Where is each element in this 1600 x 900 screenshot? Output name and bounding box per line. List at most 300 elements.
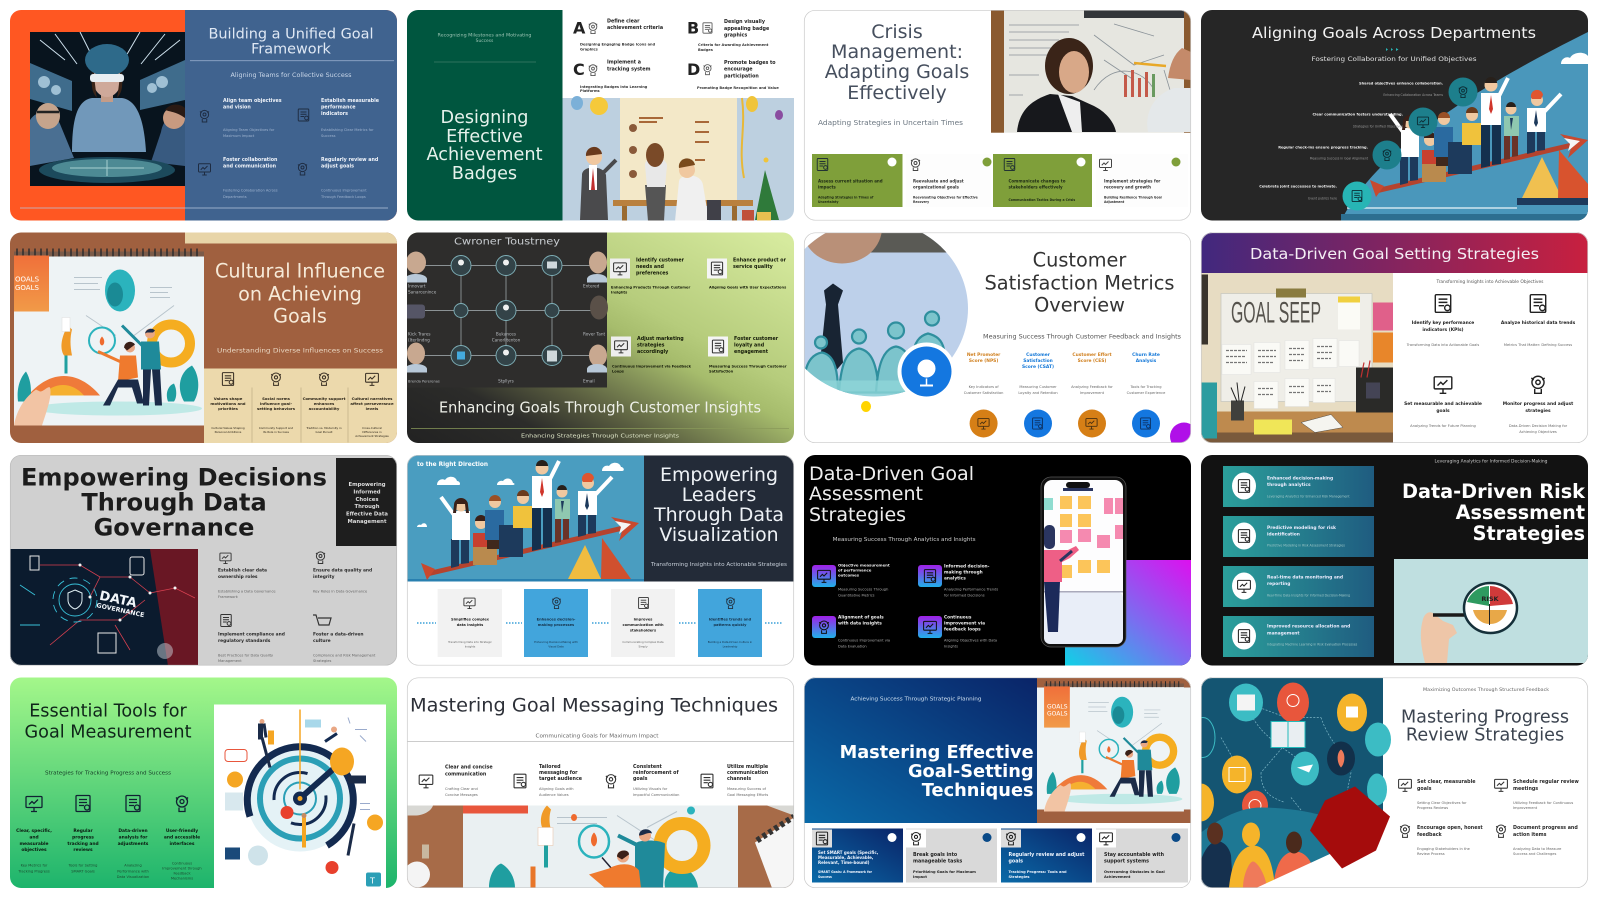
white base [1201, 232, 1588, 443]
slide card: Essential Tools for Goal Measurement [10, 678, 397, 888]
item: data quality: Ensure data quality and [313, 568, 372, 574]
chalkboard network image: Sanarcenince [408, 290, 437, 294]
slide card: Empowering Leaders Through Data Visualization [407, 455, 794, 666]
subtitle: Measuring Success Through Customer Feedback and Insights [983, 334, 1181, 340]
item: informed decisions: Analyzing Performance Trends [944, 588, 998, 592]
card: simplifies: Simplifies complex [451, 618, 490, 622]
white base [804, 10, 1191, 220]
card: trends: Leadership [723, 644, 738, 648]
slide card: Enhancing Goals Through Customer Insights [405, 232, 794, 443]
item: feedback [1400, 825, 1483, 856]
item A: Designing Engaging Badge Icons and [580, 42, 656, 46]
col: churn: Churn Rate [1132, 352, 1160, 358]
col: CSAT: Loyalty and Retention [1018, 391, 1058, 395]
item: alignment [812, 614, 890, 648]
item: tailored messaging: messaging for [539, 770, 578, 776]
item: reinforcement [606, 764, 679, 797]
goals illustration [14, 248, 204, 426]
heading: Mastering Effective [840, 742, 1034, 763]
item: enhanced decision-making: through analytics [1267, 482, 1311, 488]
item: review goals: adjust goals [321, 164, 354, 170]
step cards: impacts [818, 184, 836, 190]
item: ownership roles: Establish clear data [218, 568, 267, 574]
item: objective measurement: outcomes [838, 572, 860, 578]
heading [1402, 480, 1586, 545]
item: measurable indicators: Establishing Clear Metrics for [321, 128, 374, 132]
heading [215, 260, 385, 328]
item: celebrate successes [1259, 182, 1372, 210]
heading: Through Data [653, 504, 784, 526]
item: multiple channels: Goal Messaging Efforts [727, 793, 768, 797]
tab caption: OOALS [15, 276, 40, 284]
item: identify customer needs: needs and [636, 264, 665, 270]
item: ownership roles [218, 553, 276, 599]
heading: Empowering [660, 464, 778, 486]
footer subtitle: Enhancing Strategies Through Customer Insights [521, 434, 680, 440]
item: predictive modeling: Predictive Modeling in Risk Assessment Strategies [1267, 544, 1345, 548]
item: monitor progress: Monitor progress and adjust [1503, 401, 1573, 407]
decorative dots [1386, 48, 1398, 51]
card: accountable: support systems [1104, 858, 1149, 864]
item: multiple channels [701, 764, 769, 797]
item: data quality [313, 552, 372, 594]
item: informed decisions: analytics [944, 576, 966, 582]
item: marketing strategies: Loops [612, 370, 624, 374]
heading [1401, 708, 1569, 746]
heading [210, 28, 372, 54]
illustration: goal dial: T [369, 876, 375, 886]
green panel [407, 10, 562, 220]
item: data culture: culture [313, 638, 331, 644]
heading [426, 108, 543, 184]
item: identify customer needs: Identify customer [636, 258, 685, 264]
photo: team around holographic table [30, 32, 185, 186]
item: alignment: with data insights [838, 620, 882, 626]
col: community: accountability [309, 406, 340, 411]
card: improves: Simply [638, 644, 648, 648]
item: reinforcement: goals [633, 776, 648, 782]
item: celebrate successes: Event publics here [1308, 196, 1337, 200]
dark callout: Empowering [348, 482, 386, 488]
heading: Satisfaction Metrics [984, 272, 1174, 294]
card: improves: communication with [622, 623, 664, 627]
item: clear concise: Clear and concise [445, 764, 493, 770]
subtitle: Strategies for Tracking Progress and Success [45, 770, 171, 776]
item: review meetings: Schedule regular review [1513, 779, 1579, 785]
heading: Mastering Progress [1401, 708, 1569, 728]
item: foster collaboration: and communication [223, 164, 277, 170]
heading: Empowering Decisions [21, 464, 327, 492]
item: align team objectives: and vision [223, 104, 251, 110]
card: review goals: goals [1008, 858, 1023, 864]
chalkboard network image [405, 232, 608, 388]
col: values: Personal Ambitions [215, 430, 242, 434]
item: informed decisions: for Informed Decisions [944, 594, 985, 598]
heading: Building a Unified Goal [208, 26, 374, 42]
subtitle: Fostering Collaboration for Unified Objectives [1312, 56, 1476, 63]
item: product quality: Aligning Goals with User Expectations [709, 286, 786, 290]
illustration: goal dial [214, 704, 386, 888]
item: document progress: Success and Challenges [1513, 852, 1556, 856]
item D: encourage [724, 66, 753, 72]
item: monitor progress: Achieving Objectives [1519, 430, 1557, 434]
col: interfaces: Continuous [172, 862, 192, 866]
col: CSAT [1018, 352, 1058, 438]
chalkboard network image: Entered [583, 284, 600, 288]
col: interfaces: and accessible [164, 834, 200, 840]
item: review goals: Regularly review and [321, 157, 379, 163]
heading: Governance [94, 514, 254, 542]
item: celebrate successes: Celebrate joint successes to motivate. [1259, 184, 1337, 188]
item: feedback: feedback [1417, 832, 1443, 838]
heading [984, 248, 1174, 316]
col: narratives: Cultural narratives [352, 396, 393, 401]
item: clear goals: Progress Reviews [1417, 806, 1448, 810]
card: enhances: Enhancing Decision-Making with [534, 640, 578, 644]
item: review meetings [1495, 779, 1579, 810]
illustration: badge party scene [562, 96, 794, 221]
heading: Cultural Influence [215, 260, 385, 282]
item: feedback: Engaging Stakeholders in the [1417, 847, 1471, 851]
item: KPIs: Transforming Data into Actionable Goals [1406, 343, 1479, 347]
col: tracking [67, 796, 99, 874]
step cards: Communication Tactics During a Crisis [1008, 198, 1075, 202]
heading: Techniques [922, 780, 1034, 801]
image caption: to the Right Direction [417, 462, 488, 468]
step cards: Assess current situation and [818, 178, 883, 184]
item C: C [573, 60, 585, 79]
sails [568, 545, 601, 579]
col: NPS: Net Promoter [967, 352, 1001, 358]
heading: Assessment [809, 483, 923, 505]
item: historical trends: Analyze historical data trends [1501, 320, 1576, 326]
item: compliance [218, 614, 285, 663]
item: multiple channels: Measuring Success of [727, 787, 767, 791]
gradient block [1065, 560, 1191, 666]
col: CES: Analyzing Feedback for [1071, 385, 1113, 389]
heading: Goal Measurement [24, 722, 192, 742]
item: informed decisions: Informed decision- [944, 564, 990, 570]
step cards: Building Resilience Through Goal [1104, 196, 1162, 200]
col: data-driven [117, 796, 149, 879]
slide card: Aligning Goals Across Departments [1201, 10, 1588, 221]
black background [804, 455, 1191, 666]
card: review goals: Regularly review and adjust [1008, 852, 1085, 858]
item: KPIs [1406, 295, 1479, 347]
item: enhanced decision-making: Leveraging Analytics for Enhanced Risk Management [1267, 494, 1350, 498]
slide card: Building a Unified Goal Framework [10, 10, 397, 220]
dark title panel [644, 455, 794, 582]
slide card: Designing Effective Achievement Badges [407, 10, 794, 221]
item: clear goals: Setting Clear Objectives for [1417, 801, 1467, 805]
card: trends: Building a Data-Driven Culture in [708, 640, 753, 644]
cloud [1561, 53, 1588, 64]
dark callout: Effective Data [346, 512, 388, 518]
col: values: Values shape [214, 396, 243, 401]
card: SMART goals [812, 828, 903, 882]
item C [573, 60, 650, 93]
item: align team objectives: Align team objectives [223, 98, 282, 104]
col: data-driven: Analyzing [124, 864, 142, 868]
heading [809, 463, 974, 526]
card: enhances: Visual Data [548, 644, 564, 648]
step cards: Reevaluate and adjust [913, 178, 964, 184]
item: continuous improvement: Continuous [944, 614, 972, 620]
col: social norms: Its Role in Success [263, 430, 289, 434]
col: clear objectives: objectives [21, 847, 47, 853]
item: clear goals: goals [1417, 786, 1432, 792]
item: multiple channels: Utilize multiple [727, 764, 769, 770]
col: social norms: setting behaviors [257, 406, 296, 411]
yellow dot [861, 401, 871, 412]
blue content panel [185, 10, 397, 220]
item: product quality [707, 258, 787, 290]
card: review goals: Strategies [1008, 875, 1030, 879]
heading: Effective [446, 127, 523, 147]
heading [653, 464, 784, 546]
heading: Adapting Goals [825, 61, 969, 83]
heading: Strategies [1473, 522, 1585, 545]
brown base [10, 232, 397, 443]
small caption: Success [476, 38, 494, 44]
slide card: Empowering Decisions Through Data Governance [10, 455, 397, 666]
item C: Integrating Badges into Learning [580, 85, 648, 89]
card: accountable: Achievement [1104, 875, 1131, 879]
item: measurable indicators: Success [321, 134, 336, 138]
caption: Leveraging Analytics for Informed Decision-Making [1434, 458, 1548, 464]
heading: Customer [1033, 248, 1126, 272]
step cards: Recovery [913, 200, 929, 204]
col: tracking: tracking and [67, 841, 99, 847]
white base [804, 678, 1191, 888]
item: tailored messaging: Audience Values [539, 793, 569, 797]
gradient background [407, 232, 794, 443]
slide card: Data-Driven Risk Assessment Strategies [1201, 455, 1588, 666]
team on arrow [421, 460, 639, 580]
tan cards [204, 368, 397, 444]
col: NPS: Customer Satisfaction [964, 391, 1003, 395]
item: clear concise: Concise Messages [445, 793, 478, 797]
item: clear communication: Clear communication fosters understanding. [1312, 112, 1403, 116]
heading: Achievement [426, 145, 543, 165]
subtitle: Transforming Insights into Achievable Objectives [1436, 279, 1544, 285]
item: KPIs: indicators (KPIs) [1422, 327, 1464, 333]
item: ownership roles: Framework [218, 595, 239, 599]
slide card: Data-Driven Goal Assessment Strategies [804, 455, 1191, 666]
col: clear objectives [16, 796, 52, 874]
dark callout [336, 458, 397, 546]
red hexagon [1310, 786, 1390, 868]
item: shared objectives: Shared objectives enhance collaboration. [1359, 82, 1443, 86]
slide card: Customer Satisfaction Metrics Overview [774, 192, 1198, 450]
col: community: Tradition vs. Modernity in [305, 426, 342, 430]
col: NPS: Key Indicators of [969, 385, 999, 389]
photo: risk magnifier: RISK [1481, 595, 1500, 603]
item: data quality: integrity [313, 574, 335, 580]
tan top strip [185, 232, 397, 244]
step cards: Uncertainty [818, 200, 838, 204]
item: tailored messaging: Tailored [539, 764, 561, 770]
blue hero panel [804, 678, 1037, 823]
item: shared objectives [1359, 78, 1478, 106]
white base [1201, 678, 1588, 888]
item: continuous improvement: Aligning Objectives with Data [944, 638, 997, 642]
heading [825, 21, 969, 104]
item: compliance: Best Practices for Data Quality [218, 654, 274, 658]
item: objective measurement: Measuring Success Through [838, 588, 888, 592]
image: data governance circuit: DATA [98, 589, 138, 611]
heading: Essential Tools for [29, 702, 188, 722]
globe badge [898, 342, 956, 400]
caption: Maximizing Outcomes Through Structured Feedback [1423, 687, 1549, 693]
col: narratives: Achievement Strategies [355, 434, 389, 438]
item: reinforcement: reinforcement of [633, 770, 679, 776]
item: review meetings: Utilizing Feedback for Continuous [1513, 801, 1573, 805]
blue strip [407, 579, 644, 582]
item: marketing strategies: Continuous Improvement via Feedback [612, 364, 692, 368]
heading: Designing [441, 108, 528, 128]
card: review goals: Tracking Progress: Tools and [1008, 870, 1067, 874]
step cards: Implement strategies for [1104, 178, 1160, 184]
col: clear objectives: and [29, 834, 39, 840]
subtitle: Measuring Success Through Analytics and Insights [833, 537, 976, 543]
dark callout: Management [348, 519, 387, 525]
item A: Graphics [580, 48, 598, 52]
sailboat [1341, 150, 1588, 221]
item: align team objectives: Aligning Team Objectives for [223, 128, 275, 132]
item: align team objectives [200, 98, 282, 138]
card: manageable tasks: manageable tasks [913, 858, 962, 864]
col: CES: Improvement [1080, 391, 1105, 395]
heading: Review Strategies [1406, 726, 1564, 746]
item: predictive modeling: identification [1267, 532, 1300, 538]
col: NPS: Score (NPS) [969, 358, 998, 364]
dark callout: Choices [356, 497, 378, 503]
item: measurable indicators: performance [321, 104, 356, 110]
item: objective measurement [812, 562, 890, 598]
item: measurable indicators: Establish measurable [321, 98, 380, 104]
item: enhanced decision-making: Enhanced decision-making [1267, 476, 1333, 482]
item: customer loyalty: Satisfaction [709, 370, 734, 374]
item C: tracking system [607, 66, 650, 72]
item A: A [573, 18, 586, 38]
gradient header [1201, 232, 1588, 273]
phone illustration [1041, 477, 1126, 647]
card: enhances: Enhances decision- [537, 618, 576, 622]
white base [804, 232, 1191, 443]
item: marketing strategies: Adjust marketing [637, 336, 684, 342]
col: data-driven: analysis for [119, 834, 148, 840]
clouds [417, 463, 624, 527]
card: improves: stakeholders [630, 628, 656, 632]
item: monitor progress [1503, 376, 1573, 434]
item: identify customer needs: preferences [636, 270, 669, 276]
item: marketing strategies: strategies [637, 342, 665, 348]
item: reinforcement: Impactful Communication [633, 793, 679, 797]
item: clear communication [1312, 108, 1438, 136]
item: monitor progress: Data-Driven Decision Making for [1509, 424, 1568, 428]
item: resource allocation [1223, 616, 1374, 657]
subtitle: Adapting Strategies in Uncertain Times [818, 119, 964, 127]
item: review meetings: meetings [1513, 786, 1538, 792]
item: document progress: Analyzing Data to Measure [1513, 847, 1562, 851]
heading: Aligning Goals Across Departments [1252, 24, 1536, 42]
item: measurable goals: goals [1436, 408, 1450, 414]
heading [24, 702, 192, 742]
col: CSAT: Satisfaction [1023, 358, 1053, 364]
step cards: Adapting Strategies in Times of [818, 196, 874, 200]
item: real-time monitoring: Real-time data monitoring and [1267, 574, 1343, 580]
item: tailored messaging [514, 764, 583, 797]
item: continuous improvement: improvement via [944, 620, 985, 626]
col: NPS [964, 352, 1003, 438]
col: community: enhances [314, 401, 335, 406]
col: interfaces: Improvement through [162, 866, 202, 870]
col: narratives: Differences in [362, 430, 382, 434]
item: real-time monitoring [1223, 566, 1374, 607]
item: clear goals: Set clear, measurable [1417, 779, 1476, 785]
chalkboard network image: Stpllyrs [498, 378, 514, 384]
small caption [438, 33, 531, 42]
small caption: Recognizing Milestones and Motivating [438, 32, 532, 38]
item B: Design visually [724, 19, 766, 25]
goals illustration: GOALS [1047, 704, 1068, 710]
item: data culture: Foster a data-driven [313, 632, 363, 638]
heading [840, 742, 1034, 801]
col: interfaces: User-friendly [166, 828, 198, 834]
heading: Visualization [659, 524, 779, 546]
col: interfaces [162, 796, 202, 880]
item: feedback: Encourage open, honest [1417, 825, 1483, 831]
card: manageable tasks [906, 828, 997, 882]
card: SMART goals: SMART Goals: A Framework for [818, 870, 873, 874]
chalkboard network image: Cwroner Toustrney [454, 236, 560, 248]
card: manageable tasks: Impact [913, 875, 927, 879]
slide card: Data-Driven Goal Setting Strategies [1201, 232, 1588, 443]
item: resource allocation: Integrating Machine Learning in Risk Evaluation Processes [1267, 642, 1358, 646]
tab caption [15, 276, 40, 292]
item: enhanced decision-making [1223, 466, 1374, 507]
item D [687, 60, 779, 90]
caption: Achieving Success Through Strategic Planning [850, 696, 982, 702]
col: interfaces: Mechanisms [171, 876, 193, 880]
item B: B [687, 18, 699, 38]
col: social norms [257, 373, 296, 434]
item: data culture [313, 615, 376, 663]
heading: Management: [831, 41, 963, 63]
heading: Through Data [81, 488, 267, 516]
heading: Mastering Goal Messaging Techniques [410, 696, 778, 716]
item: reinforcement: Utilizing Visuals for [633, 787, 668, 791]
item: data quality: Key Roles in Data Governance [313, 590, 368, 594]
heading: Goal-Setting [908, 761, 1034, 782]
col: social norms: Community Support and [259, 426, 293, 430]
col: data-driven: Performance with [117, 870, 149, 874]
item: customer loyalty: Foster customer [734, 336, 779, 342]
item: regular check-ins: Regular check-ins ensure progress tracking. [1278, 146, 1368, 150]
goals illustration: GOALS [1047, 710, 1068, 718]
item: clear concise: Crafting Clear and [445, 787, 478, 791]
card: trends: patterns quickly [713, 623, 747, 627]
heading: Data-Driven Risk [1402, 480, 1586, 503]
item C: Implement a [607, 60, 641, 66]
card: trends: Identifies trends and [709, 618, 752, 622]
image: data governance circuit: GOVERNANCE [96, 602, 145, 619]
col: CSAT: Customer [1026, 352, 1051, 358]
item: predictive modeling [1223, 516, 1374, 557]
blue swoosh [1341, 32, 1588, 221]
col: social norms: Social norms [262, 396, 291, 401]
